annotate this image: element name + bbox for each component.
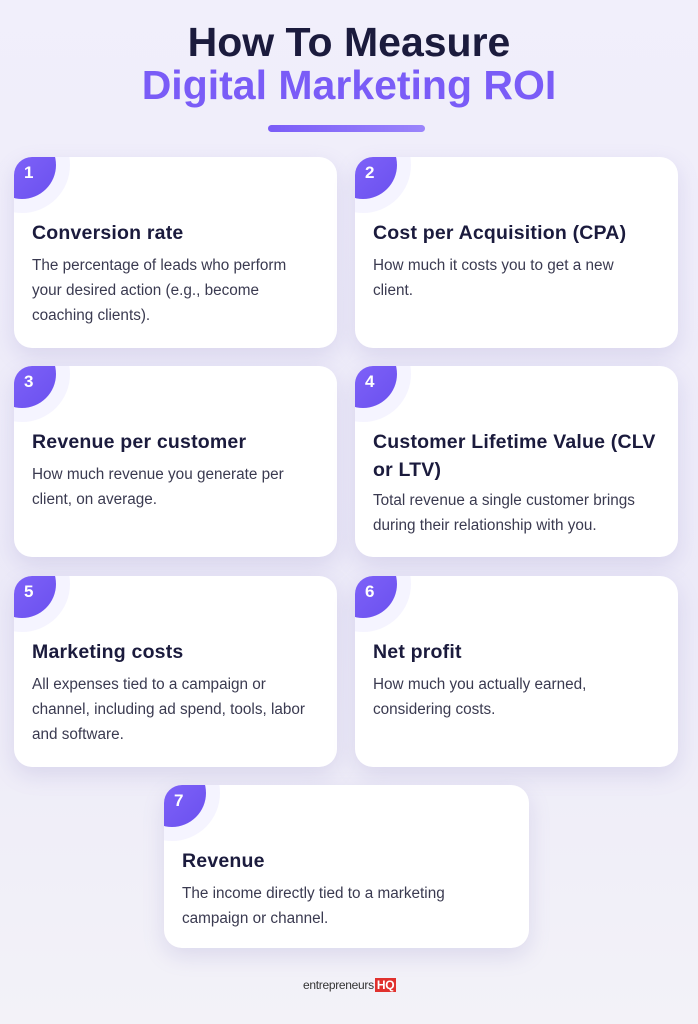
heading 6: Net profit (373, 641, 462, 663)
badge 1 (0, 131, 56, 199)
heading 2: Cost per Acquisition (CPA) (373, 222, 626, 244)
card 4 (355, 366, 678, 557)
card 2: 2 (365, 163, 374, 182)
badge 7 (138, 759, 206, 827)
card 1 (14, 157, 337, 348)
badge 2 (329, 131, 397, 199)
text 3: How much revenue you generate per client, on average. (32, 466, 284, 508)
heading 7: Revenue (182, 850, 265, 872)
card 2 (355, 157, 678, 348)
text 5: All expenses tied to a campaign or channel, including ad spend, tools, labor and software. (32, 676, 305, 743)
underline bar (268, 125, 425, 132)
heading 3: Revenue per customer (32, 431, 246, 453)
card 6 (355, 576, 678, 767)
badge 6 (329, 550, 397, 618)
card 5 (14, 576, 337, 767)
logo: entrepreneursHQ (303, 978, 394, 992)
card 5: 5 (24, 582, 33, 601)
text 4: Total revenue a single customer brings during their relationship with you. (373, 492, 635, 534)
subtitle: Digital Marketing ROI (142, 62, 556, 108)
card 3 (14, 366, 337, 557)
card 1: 1 (24, 163, 33, 182)
badge 4 (329, 340, 397, 408)
card 4: 4 (365, 372, 374, 391)
text 1: The percentage of leads who perform your desired action (e.g., become coaching clients). (32, 257, 286, 324)
card 7: 7 (174, 791, 183, 810)
text 6: How much you actually earned, considering costs. (373, 676, 586, 718)
text 7: The income directly tied to a marketing campaign or channel. (182, 885, 445, 927)
heading 1: Conversion rate (32, 222, 183, 244)
badge 3 (0, 340, 56, 408)
card 3: 3 (24, 372, 33, 391)
text 2: How much it costs you to get a new client. (373, 257, 614, 299)
heading 5: Marketing costs (32, 641, 183, 663)
badge 5 (0, 550, 56, 618)
heading 4: Customer Lifetime Value (CLV or LTV) (373, 431, 656, 481)
card 6: 6 (365, 582, 374, 601)
title: How To Measure (188, 19, 510, 65)
card 7 (164, 785, 529, 948)
